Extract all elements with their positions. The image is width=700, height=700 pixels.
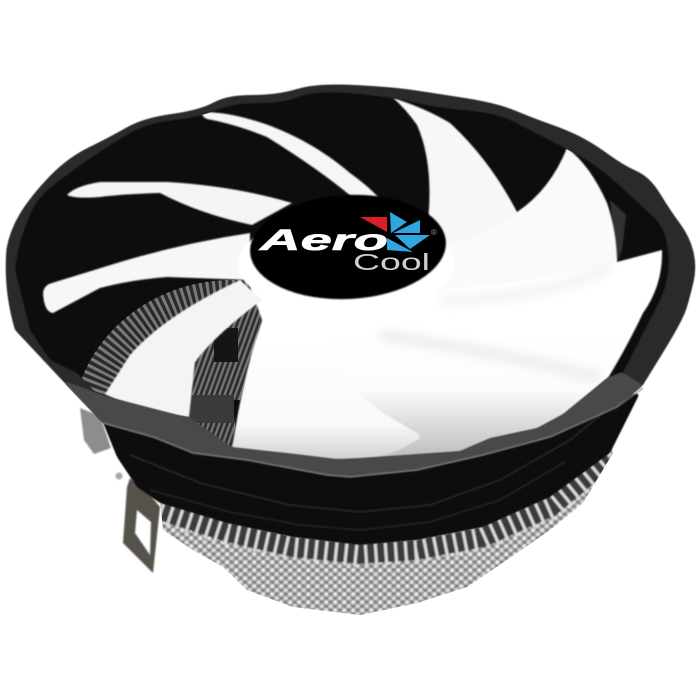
mounting bracket <box>123 478 160 573</box>
hub collar <box>238 214 454 314</box>
fan frame: outer rim <box>6 84 695 477</box>
blade: bottom front <box>232 320 420 460</box>
interior heatsink fins <box>82 280 262 448</box>
blade: thin top-left <box>202 112 378 197</box>
logo mark: origami bird <box>360 212 430 252</box>
blade: left middle <box>43 233 250 313</box>
blade: right upper <box>464 148 618 287</box>
hub with logo <box>238 190 454 314</box>
heatsink: lower aluminium fins <box>160 448 613 615</box>
logo word: Aero: Aero <box>258 224 388 257</box>
hub disc <box>247 190 449 304</box>
blade: right large <box>362 249 664 458</box>
blade: lower left <box>105 280 262 417</box>
interior grey panel on right wall <box>610 200 626 262</box>
logo word: Cool: Cool <box>353 249 430 275</box>
fan blades <box>43 98 662 465</box>
blade root underlay <box>250 286 440 321</box>
product illustration: CPU cooler <box>4 84 696 615</box>
fan frame: inner cavity <box>15 92 669 462</box>
registered mark: ® <box>431 228 437 237</box>
frame front lip <box>62 372 643 477</box>
thumb screw <box>80 408 122 480</box>
blade: left upper <box>67 182 292 225</box>
soft blade shading <box>380 268 610 378</box>
black shroud band <box>100 393 640 545</box>
blade: top right narrow <box>392 98 518 246</box>
